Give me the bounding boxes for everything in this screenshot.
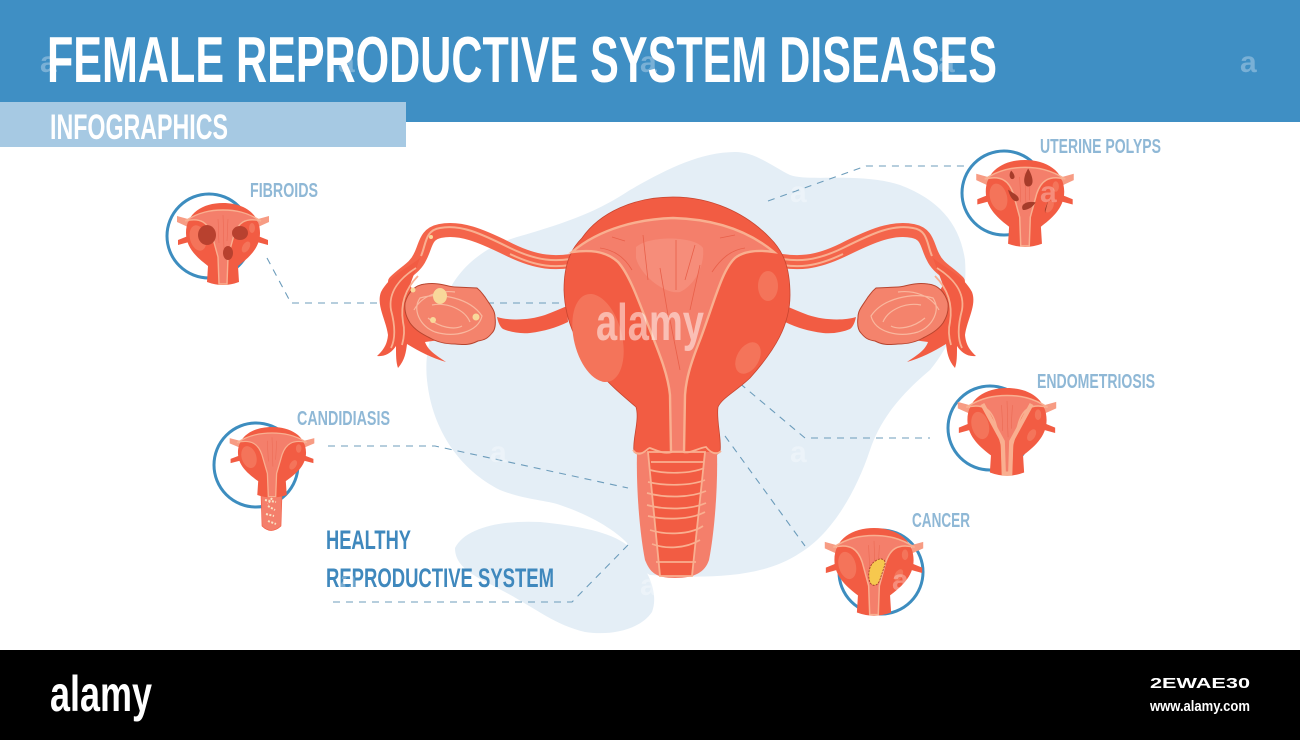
panel: cancer bbox=[825, 510, 970, 616]
watermarks: a bbox=[892, 564, 909, 597]
leader lines bbox=[267, 166, 968, 602]
watermarks: alamy bbox=[596, 294, 704, 352]
background blob: label bbox=[455, 522, 654, 633]
watermarks: a bbox=[338, 46, 355, 79]
watermarks: a bbox=[640, 46, 657, 79]
cervix lips bbox=[633, 447, 721, 454]
footer bar bbox=[0, 650, 1300, 740]
panel: endometriosis bbox=[948, 371, 1155, 476]
ring bbox=[167, 194, 251, 278]
footer image id and site: www.alamy.com bbox=[1149, 699, 1250, 715]
watermarks: a bbox=[790, 436, 807, 469]
vagina bbox=[637, 452, 717, 578]
vaginal canal with candida bbox=[261, 495, 282, 530]
vaginal canal with rugae bbox=[648, 452, 705, 576]
subtitle bar bbox=[0, 102, 406, 147]
footer logo: alamy bbox=[50, 666, 152, 722]
uterus icon with tumour bbox=[825, 528, 923, 616]
watermarks: a bbox=[1240, 46, 1257, 79]
label: FIBROIDS bbox=[250, 180, 318, 202]
uterus icon with fibroids bbox=[177, 203, 269, 285]
ring bbox=[962, 151, 1046, 235]
label: UTERINE POLYPS bbox=[1040, 136, 1161, 158]
watermarks: a bbox=[40, 46, 57, 79]
uterine cavity bbox=[572, 218, 774, 452]
label: healthy reproductive system: HEALTHY bbox=[326, 525, 411, 555]
label: healthy reproductive system: REPRODUCTIVE SYSTEM bbox=[326, 563, 554, 593]
ring bbox=[839, 530, 923, 614]
watermarks: a bbox=[790, 176, 807, 209]
right adnexa bbox=[768, 227, 976, 368]
ring bbox=[948, 386, 1032, 470]
watermarks: a bbox=[938, 46, 955, 79]
label: healthy reproductive system bbox=[326, 525, 554, 593]
watermarks bbox=[40, 46, 1257, 602]
left adnexa: tube, fimbriae, ligament, ovary bbox=[377, 227, 585, 368]
uterus icon with thickened lining bbox=[958, 388, 1056, 476]
watermarks: a bbox=[1040, 176, 1057, 209]
uterus icon with polyps bbox=[976, 160, 1074, 247]
watermarks: a bbox=[340, 564, 357, 597]
watermarks: a bbox=[640, 569, 657, 602]
ring bbox=[214, 423, 298, 507]
panel: uterine polyps bbox=[962, 136, 1161, 247]
cavity pale area bbox=[636, 238, 703, 292]
header banner bbox=[0, 0, 1300, 122]
left ovary follicles bbox=[410, 235, 480, 323]
label: CANCER bbox=[912, 510, 970, 532]
uterus icon bbox=[230, 427, 314, 498]
main illustration: healthy reproductive system bbox=[377, 197, 976, 578]
background blob: main bbox=[426, 152, 965, 577]
panel: fibroids bbox=[167, 180, 318, 285]
subtitle bar: INFOGRAPHICS bbox=[50, 108, 228, 147]
watermarks: a bbox=[490, 436, 507, 469]
label: CANDIDIASIS bbox=[297, 408, 390, 430]
footer image id and site bbox=[1149, 675, 1250, 715]
uterine wall highlights bbox=[564, 271, 778, 387]
label: ENDOMETRIOSIS bbox=[1037, 371, 1155, 393]
footer image id and site: 2EWAE30 bbox=[1150, 675, 1250, 692]
uterine body bbox=[564, 197, 790, 456]
panel: candidiasis bbox=[214, 408, 390, 530]
cavity folds bbox=[600, 235, 745, 370]
